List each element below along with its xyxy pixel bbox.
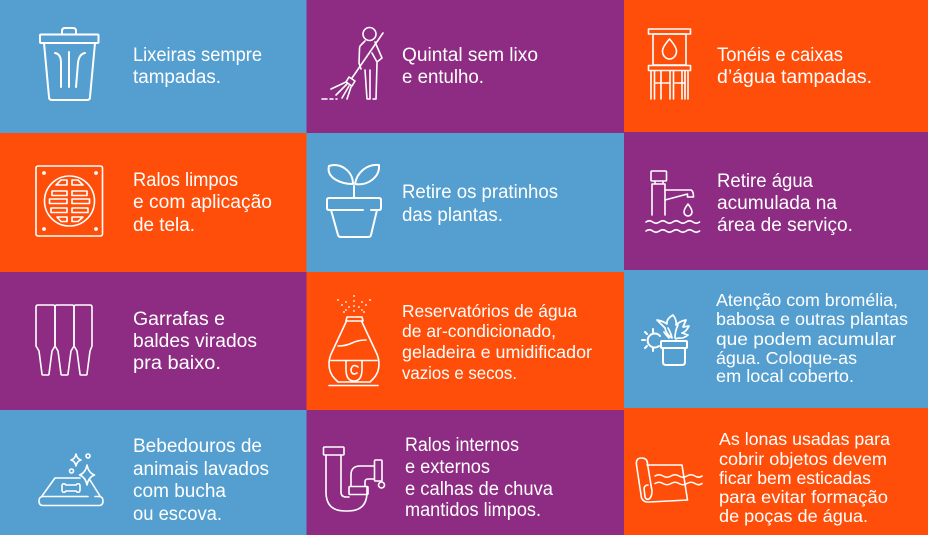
text: bebedouros bbox=[133, 436, 269, 525]
text: garrafas: Garrafas e bbox=[133, 309, 225, 330]
panel: lonas bbox=[624, 408, 928, 535]
icon: trash can bbox=[40, 28, 98, 100]
text: bebedouros: ou escova. bbox=[133, 504, 222, 525]
text: reservatórios: Reservatórios de água bbox=[402, 301, 577, 321]
panel: tonéis bbox=[624, 0, 928, 132]
text: garrafas: baldes virados bbox=[133, 331, 257, 352]
text: bromélia: babosa e outras plantas bbox=[716, 309, 908, 329]
text: reservatórios: geladeira e umidificador bbox=[402, 342, 592, 362]
text: ralos internos: mantidos limpos. bbox=[405, 500, 541, 521]
text: tonéis: Tonéis e caixas bbox=[717, 45, 843, 66]
text: bebedouros: Bebedouros de bbox=[133, 436, 262, 457]
text: ralos: de tela. bbox=[133, 215, 195, 236]
text: tonéis bbox=[717, 45, 872, 88]
text: ralos: e com aplicação bbox=[133, 192, 272, 213]
icon: plant and sun bbox=[642, 315, 689, 365]
text: bromélia: água. Coloque-as bbox=[716, 348, 857, 368]
text: área de serviço: área de serviço. bbox=[717, 215, 853, 236]
text: lonas: ficar bem esticadas bbox=[719, 468, 871, 488]
text: ralos internos: e externos bbox=[405, 457, 490, 478]
icon: water tower bbox=[648, 29, 690, 99]
text: tonéis: d’água tampadas. bbox=[717, 67, 872, 88]
text: bebedouros: com bucha bbox=[133, 481, 226, 502]
text: quintal: Quintal sem lixo bbox=[402, 45, 538, 66]
text: ralos bbox=[133, 170, 272, 236]
text: ralos internos: e calhas de chuva bbox=[405, 479, 553, 500]
icon: rolled tarp bbox=[636, 458, 702, 502]
panel: reservatórios bbox=[306, 272, 624, 410]
text: pratinhos: das plantas. bbox=[402, 205, 503, 226]
text: lonas: para evitar formação bbox=[719, 487, 888, 507]
text: reservatórios: vazios e secos. bbox=[402, 363, 517, 383]
icon: person sweeping bbox=[322, 28, 383, 99]
text: bromélia: Atenção com bromélia, bbox=[716, 290, 898, 310]
icon: floor drain bbox=[36, 166, 102, 236]
text: ralos internos bbox=[405, 435, 553, 521]
text: garrafas bbox=[133, 309, 257, 374]
panel: quintal bbox=[306, 0, 624, 133]
icon: dripping faucet bbox=[646, 171, 700, 232]
text: ralos: Ralos limpos bbox=[133, 170, 238, 191]
panel: bromélia bbox=[624, 270, 928, 408]
panel: ralos internos bbox=[306, 410, 624, 535]
panel: bebedouros bbox=[0, 410, 306, 535]
text: lixeiras bbox=[133, 45, 262, 88]
panel: garrafas bbox=[0, 272, 306, 410]
text: ralos internos: Ralos internos bbox=[405, 435, 519, 456]
text: área de serviço: acumulada na bbox=[717, 193, 837, 214]
text: bromélia: que podem acumular bbox=[716, 329, 896, 349]
text: bromélia: em local coberto. bbox=[716, 366, 854, 386]
text: reservatórios: de ar-condicionado, bbox=[402, 321, 556, 341]
text: quintal bbox=[402, 45, 538, 88]
text: lonas: As lonas usadas para bbox=[719, 429, 890, 449]
text: reservatórios bbox=[402, 301, 592, 383]
panel: lixeiras bbox=[0, 0, 306, 133]
panel: ralos bbox=[0, 133, 306, 272]
text: quintal: e entulho. bbox=[402, 67, 484, 88]
icon: potted plant bbox=[327, 165, 381, 237]
text: lonas bbox=[719, 429, 890, 526]
panel: pratinhos bbox=[306, 133, 624, 272]
text: lonas: de poças de água. bbox=[719, 506, 868, 526]
text: garrafas: pra baixo. bbox=[133, 353, 221, 374]
text: lixeiras: tampadas. bbox=[133, 67, 221, 88]
icon: humidifier bbox=[329, 295, 379, 386]
text: pratinhos: Retire os pratinhos bbox=[402, 182, 558, 203]
text: bromélia bbox=[716, 290, 908, 386]
text: pratinhos bbox=[402, 182, 558, 226]
text: área de serviço bbox=[717, 171, 853, 236]
icon: pet bowl with sparkles bbox=[39, 454, 103, 506]
panel: área de serviço bbox=[624, 132, 928, 270]
text: bebedouros: animais lavados bbox=[133, 459, 269, 480]
text: lixeiras: Lixeiras sempre bbox=[133, 45, 262, 66]
icon: upside-down bottles bbox=[36, 305, 92, 375]
text: área de serviço: Retire água bbox=[717, 171, 813, 192]
icon: drain pipe bbox=[324, 447, 384, 511]
text: lonas: cobrir objetos devem bbox=[719, 449, 887, 469]
